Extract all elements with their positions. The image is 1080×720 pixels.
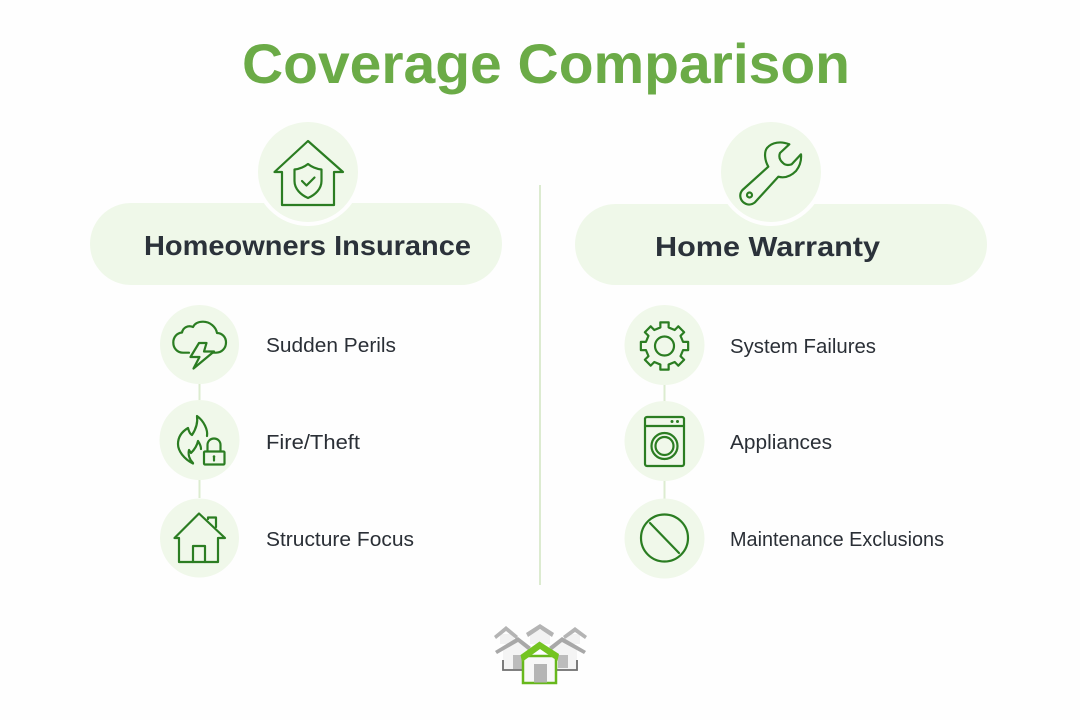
panel: home warranty [575,118,987,578]
item: fire and theft: Fire/Theft [266,432,360,454]
item: fire and theft [160,400,360,480]
icon: house with shield [274,141,343,205]
icon: neighborhood of houses [494,624,587,683]
heading pill: homeowners insurance [90,118,502,285]
heading pill: home warranty: Home Warranty [655,231,880,262]
item: sudden perils [160,305,396,384]
item: structure focus: Structure Focus [266,529,414,551]
item: appliances [624,401,832,481]
title: Coverage Comparison [242,32,850,95]
item: sudden perils: Sudden Perils [266,335,396,357]
heading pill: homeowners insurance: Homeowners Insurance [144,230,471,261]
item: appliances: Appliances [730,432,832,454]
icon: wrench [740,142,801,204]
item: maintenance exclusions: Maintenance Exclusions [730,529,944,551]
heading pill: home warranty [575,118,987,285]
item: maintenance exclusions [624,498,944,578]
item: system failures [624,305,876,385]
panel: homeowners insurance [90,118,502,578]
item: structure focus [160,498,414,578]
item: system failures: System Failures [730,336,876,358]
